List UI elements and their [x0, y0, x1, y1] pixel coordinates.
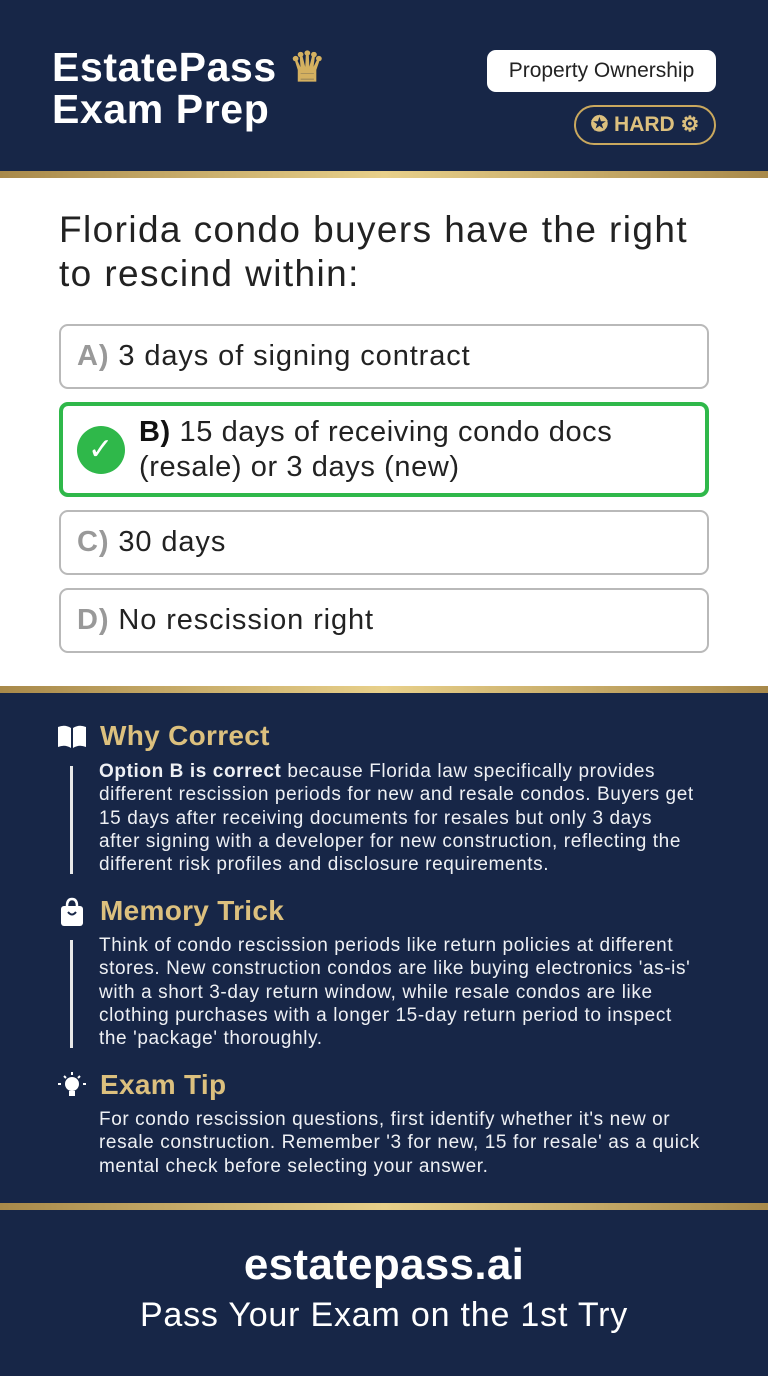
title: EstatePass ♛: [52, 44, 326, 90]
header: [0, 0, 768, 172]
text: why correct: [99, 761, 694, 875]
text: exam tip: For condo rescission questions, first identify whether it's new or: [99, 1109, 670, 1130]
icon: bag: [61, 898, 83, 926]
text: memory trick: Think of condo rescission periods like return policies at different: [99, 935, 673, 956]
text: why correct: different rescission periods for new and resale condos. Buyers get: [99, 784, 694, 805]
section: why correct: Why Correct: [100, 720, 270, 751]
question: Florida condo buyers have the right: [59, 209, 688, 250]
option B correct: ✓: [88, 432, 114, 466]
option A: 3 days of signing contract: [118, 340, 471, 372]
option B correct: B) 15 days of receiving condo docs: [139, 416, 612, 448]
text: exam tip: [99, 1109, 700, 1177]
text: why correct: after signing with a developer for new construction, reflecting the: [99, 831, 681, 852]
category badge: [487, 50, 716, 92]
text: why correct: 15 days after receiving documents for resales but only 3 days: [99, 808, 652, 829]
title: Exam Prep: [52, 86, 269, 132]
option A: [59, 324, 709, 389]
option D: D): [77, 604, 109, 636]
footer: [0, 1210, 768, 1376]
difficulty badge: ✪ HARD ⚙: [591, 113, 699, 136]
text: memory trick: clothing purchases with a longer 15-day return period to inspect: [99, 1005, 672, 1026]
option B correct: [59, 402, 709, 497]
option A: A): [77, 340, 109, 372]
text: memory trick: [99, 935, 690, 1049]
icon: lightbulb: [58, 1072, 86, 1096]
text: why correct: different risk profiles and disclosure requirements.: [99, 854, 549, 875]
tagline: Pass Your Exam on the 1st Try: [140, 1296, 628, 1334]
icon: book: [58, 726, 86, 748]
footer url: estatepass.ai: [244, 1240, 524, 1289]
text: exam tip: resale construction. Remember '3 for new, 15 for resale' as a quick: [99, 1132, 700, 1153]
option B correct: (resale) or 3 days (new): [139, 450, 460, 482]
title: [52, 44, 326, 132]
question: [59, 209, 688, 294]
text: exam tip: mental check before selecting your answer.: [99, 1156, 489, 1177]
category badge: Property Ownership: [509, 59, 694, 82]
option C: [59, 510, 709, 575]
text: memory trick: stores. New construction condos are like buying electronics 'as-is': [99, 958, 690, 979]
text: why correct: Option B is correct because Florida law specifically provides: [99, 761, 655, 782]
text: memory trick: with a short 3-day return window, while resale condos are like: [99, 982, 653, 1003]
text: memory trick: the 'package' thoroughly.: [99, 1028, 323, 1049]
option D: [59, 588, 709, 653]
option C: C): [77, 526, 109, 558]
question: to rescind within:: [59, 253, 360, 294]
section: exam tip: Exam Tip: [100, 1069, 226, 1100]
option C: 30 days: [118, 526, 226, 558]
question panel: [0, 178, 768, 686]
section: memory trick: Memory Trick: [100, 895, 284, 926]
difficulty badge: [574, 105, 716, 145]
option D: No rescission right: [118, 604, 374, 636]
